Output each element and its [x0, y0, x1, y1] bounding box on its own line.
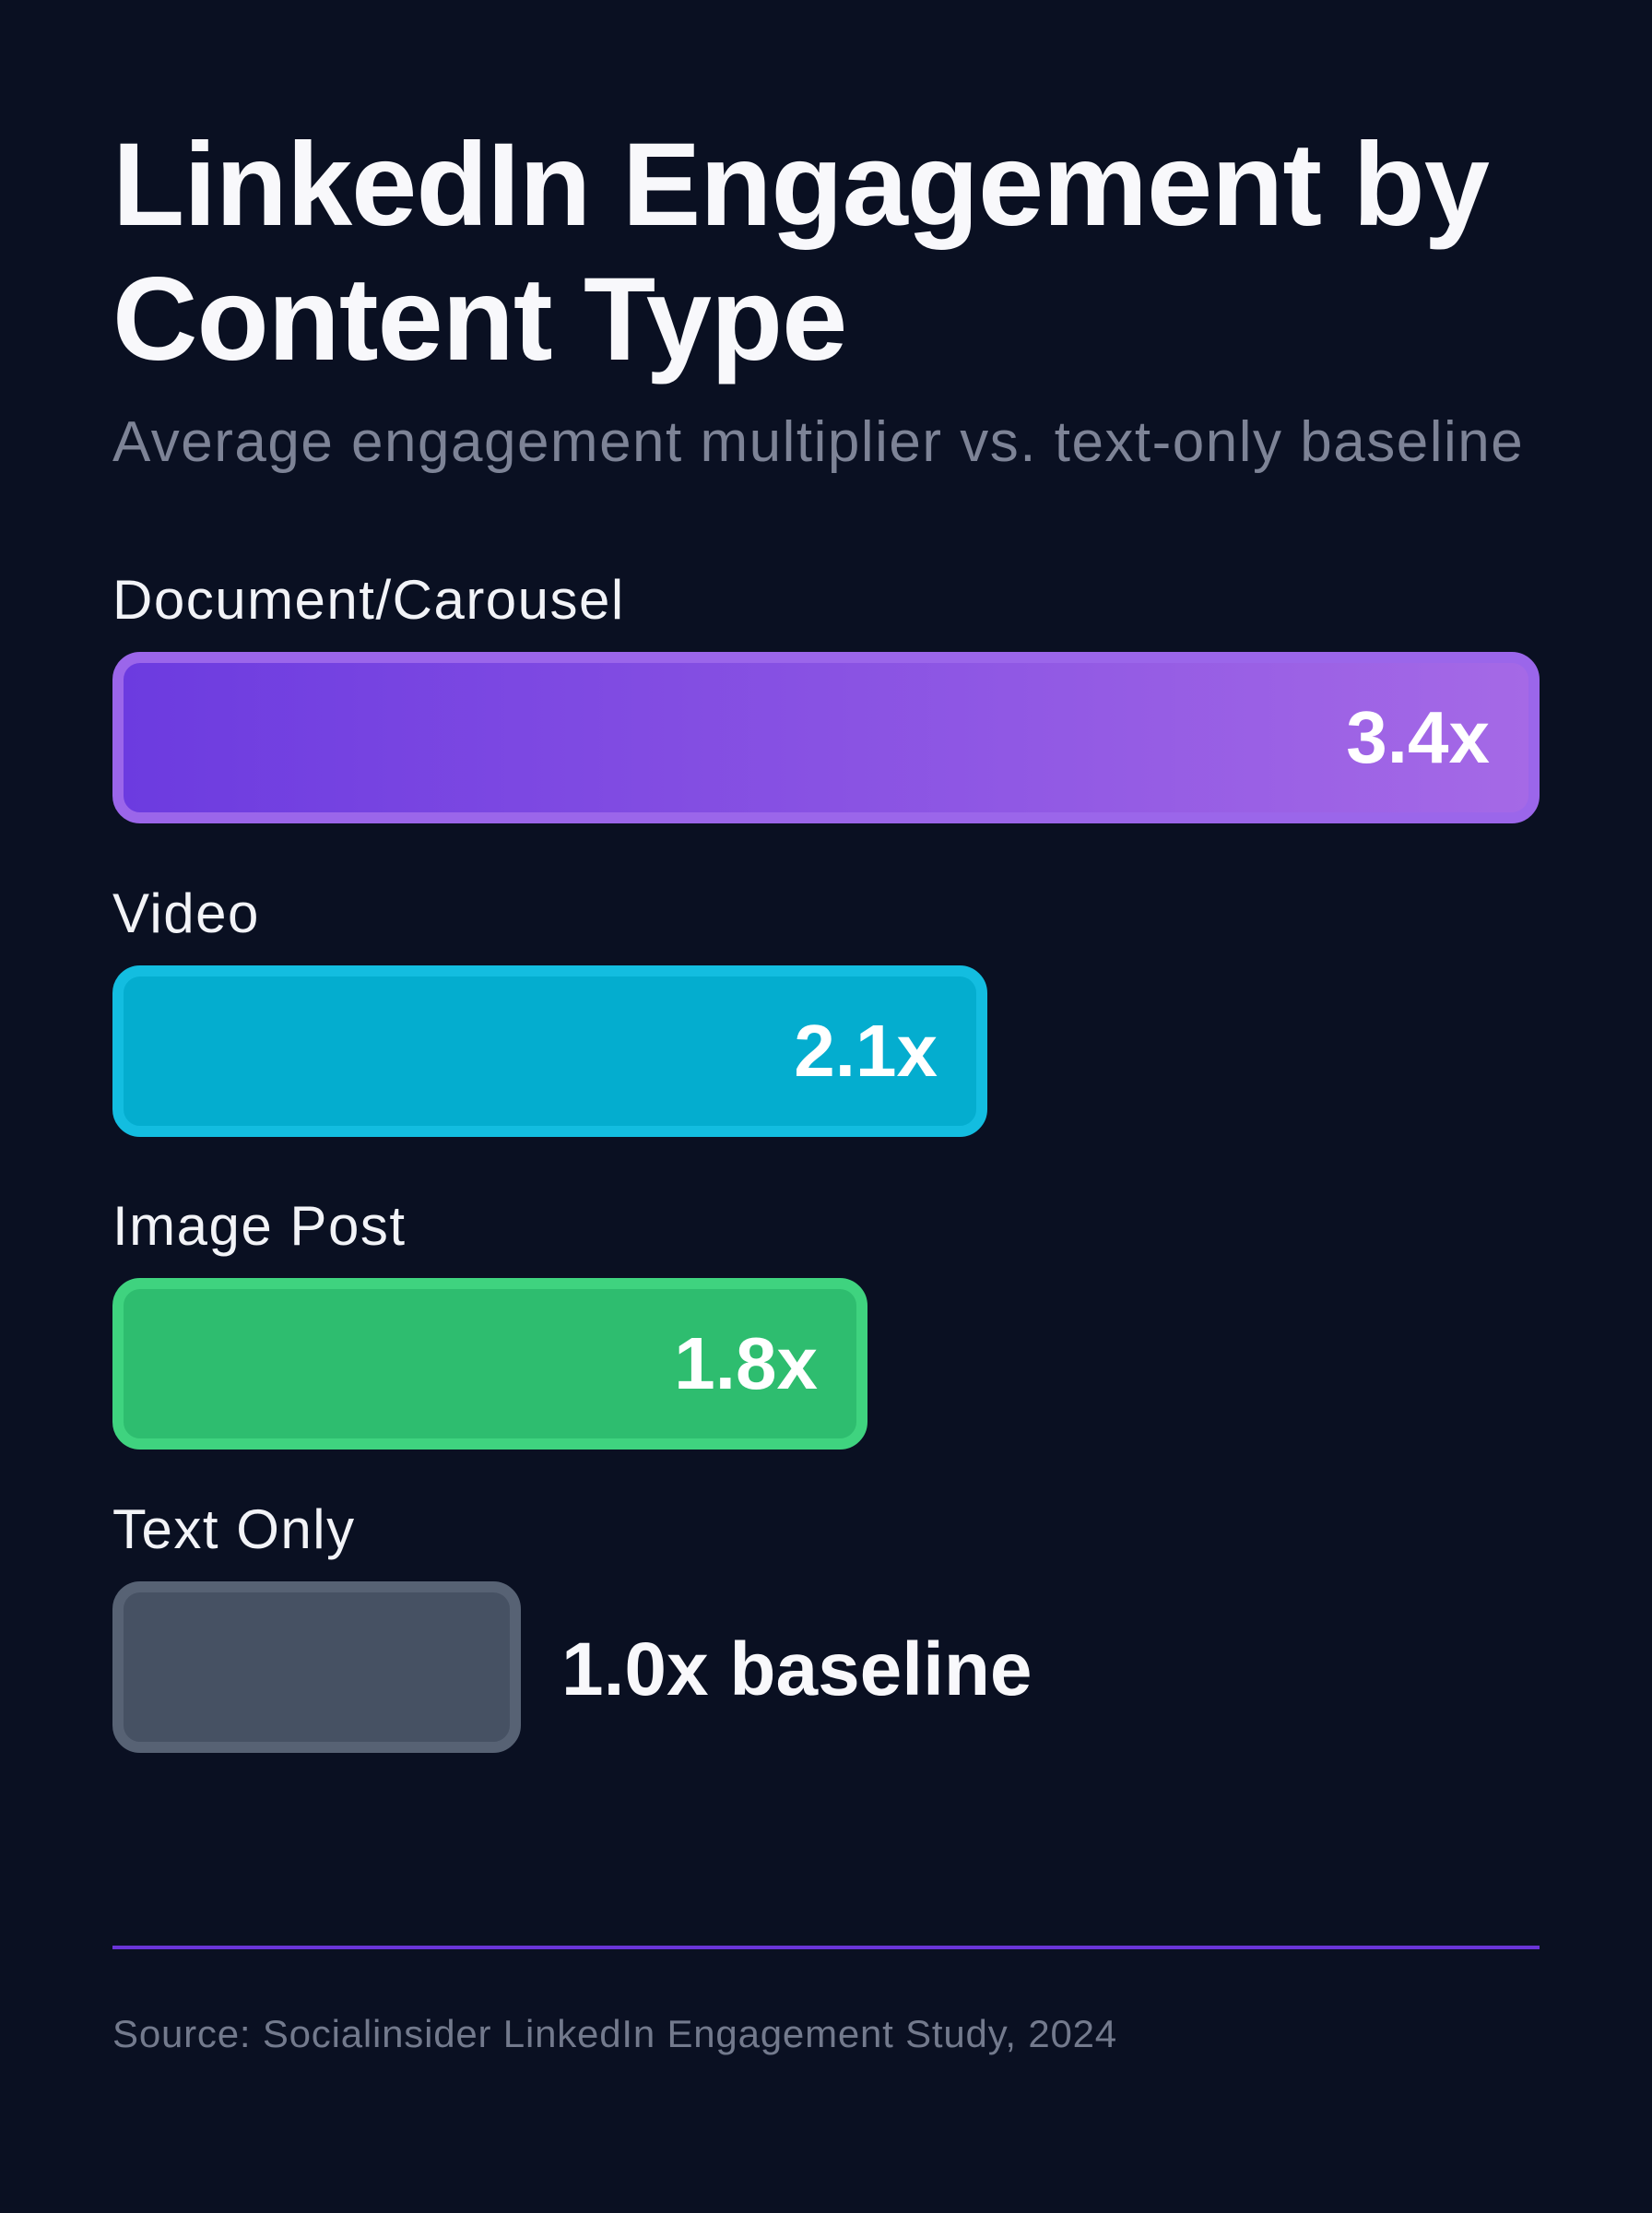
bar: document/carousel 3.4x: 3.4x	[1346, 696, 1490, 778]
bar: video 2.1x: 2.1x	[794, 1010, 938, 1092]
label: image post: Image Post	[112, 1195, 406, 1257]
source: Source: Socialinsider LinkedIn Engagement Study, 2024	[112, 2012, 1117, 2055]
value: 1.0x baseline: 1.0x baseline	[561, 1627, 1032, 1711]
subtitle: Average engagement multiplier vs. text-only baseline	[112, 410, 1524, 474]
bar: image post 1.8x	[112, 1278, 867, 1450]
title: LinkedIn Engagement by	[112, 119, 1489, 251]
title	[112, 119, 1490, 385]
bar: text only	[112, 1581, 521, 1753]
bar: video 2.1x	[112, 965, 987, 1137]
bar: document/carousel 3.4x	[112, 652, 1540, 823]
bar: image post 1.8x: 1.8x	[674, 1322, 818, 1404]
title: Content Type	[112, 254, 846, 385]
label: video: Video	[112, 882, 260, 944]
label: text only: Text Only	[112, 1498, 356, 1560]
label: document/carousel: Document/Carousel	[112, 569, 625, 631]
